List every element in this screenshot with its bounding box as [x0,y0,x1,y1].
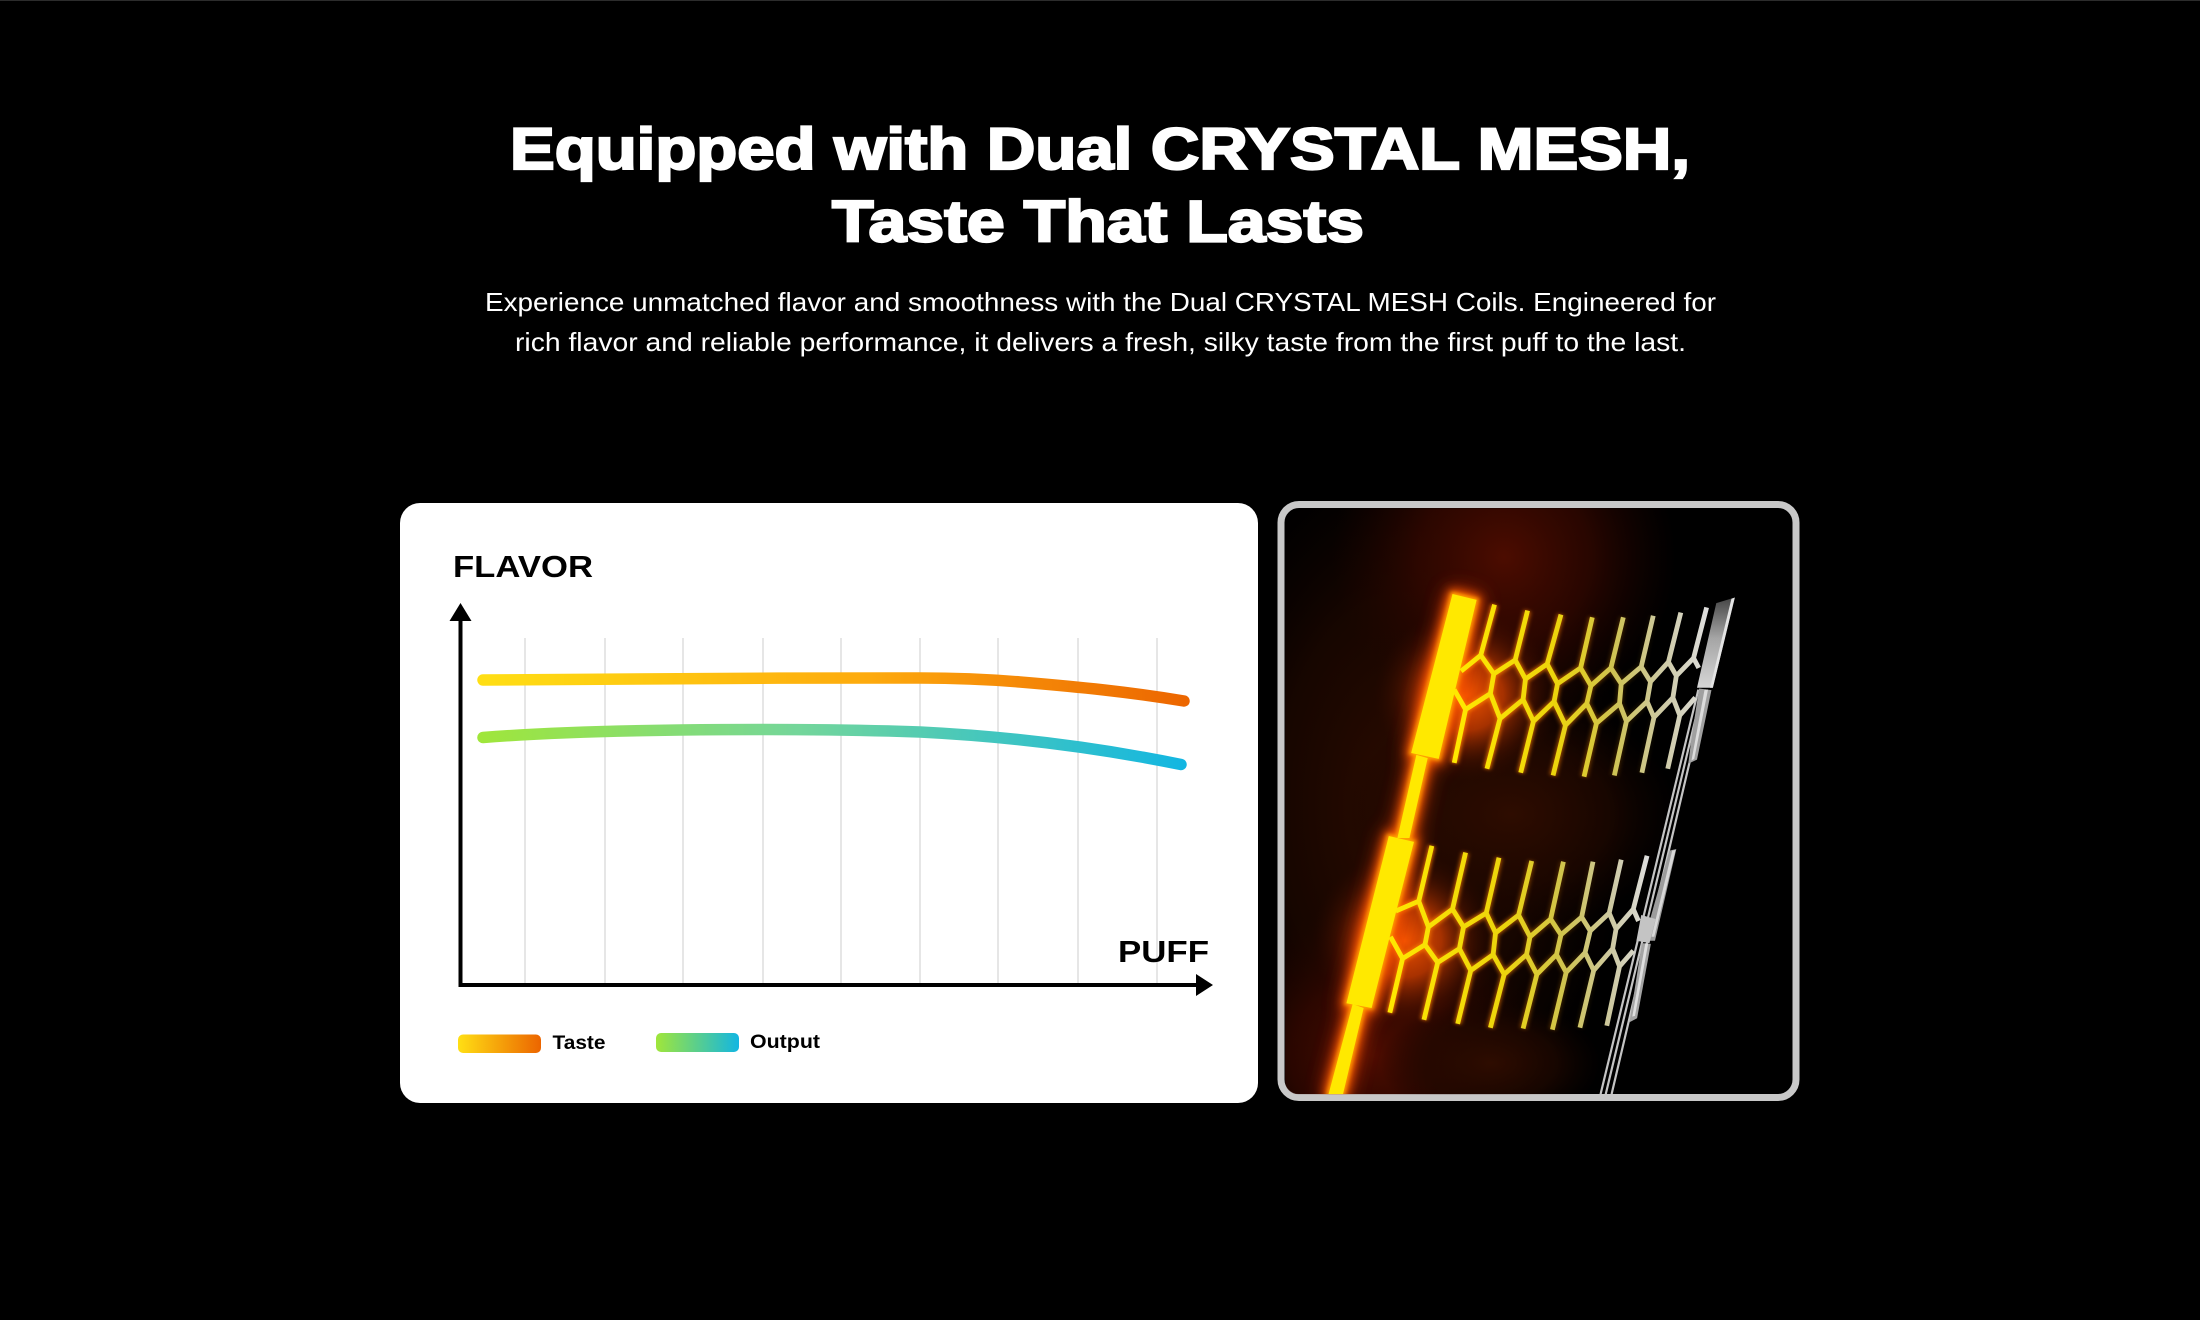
lower mesh strip [1390,846,1647,1030]
legend: taste [458,1033,606,1054]
legend: output [656,1032,821,1053]
yellow contact bars [1329,594,1477,1094]
glowing bar halo [1329,594,1477,1094]
axis label: puff: PUFF [1118,934,1209,969]
panel: glowing mesh coil image [1278,501,1800,1101]
description text: rich flavor and reliable performance, it delivers a fresh, silky taste from the first puff to the last. [515,327,1686,357]
curve: taste [483,678,1184,701]
wide bar halo [1329,594,1477,1094]
title [510,117,1690,254]
glowing bar inner halo [1329,594,1477,1094]
heated glow behind mesh [1324,628,1548,1014]
title: Taste That Lasts [832,190,1364,254]
description text: Experience unmatched flavor and smoothness with the Dual CRYSTAL MESH Coils. Engineered for [485,287,1716,317]
legend: output: Output [750,1032,821,1053]
x axis with arrow [458,974,1213,996]
silver terminal bottom [1630,849,1676,1022]
ambient glow [1285,508,1652,1094]
chart grid lines [525,638,1157,985]
silver terminal top [1688,598,1735,764]
upper mesh strip [1454,605,1707,777]
title: Equipped with Dual CRYSTAL MESH, [510,117,1690,182]
panel: flavor chart [400,503,1258,1103]
curve: output [483,730,1181,764]
silver rails [1601,690,1707,1094]
lower mesh glow [1390,846,1594,1030]
axis label: flavor: FLAVOR [453,549,593,584]
y axis with arrow [450,603,472,987]
upper mesh glow [1454,605,1654,777]
description text [485,287,1716,357]
legend: taste: Taste [552,1033,606,1054]
